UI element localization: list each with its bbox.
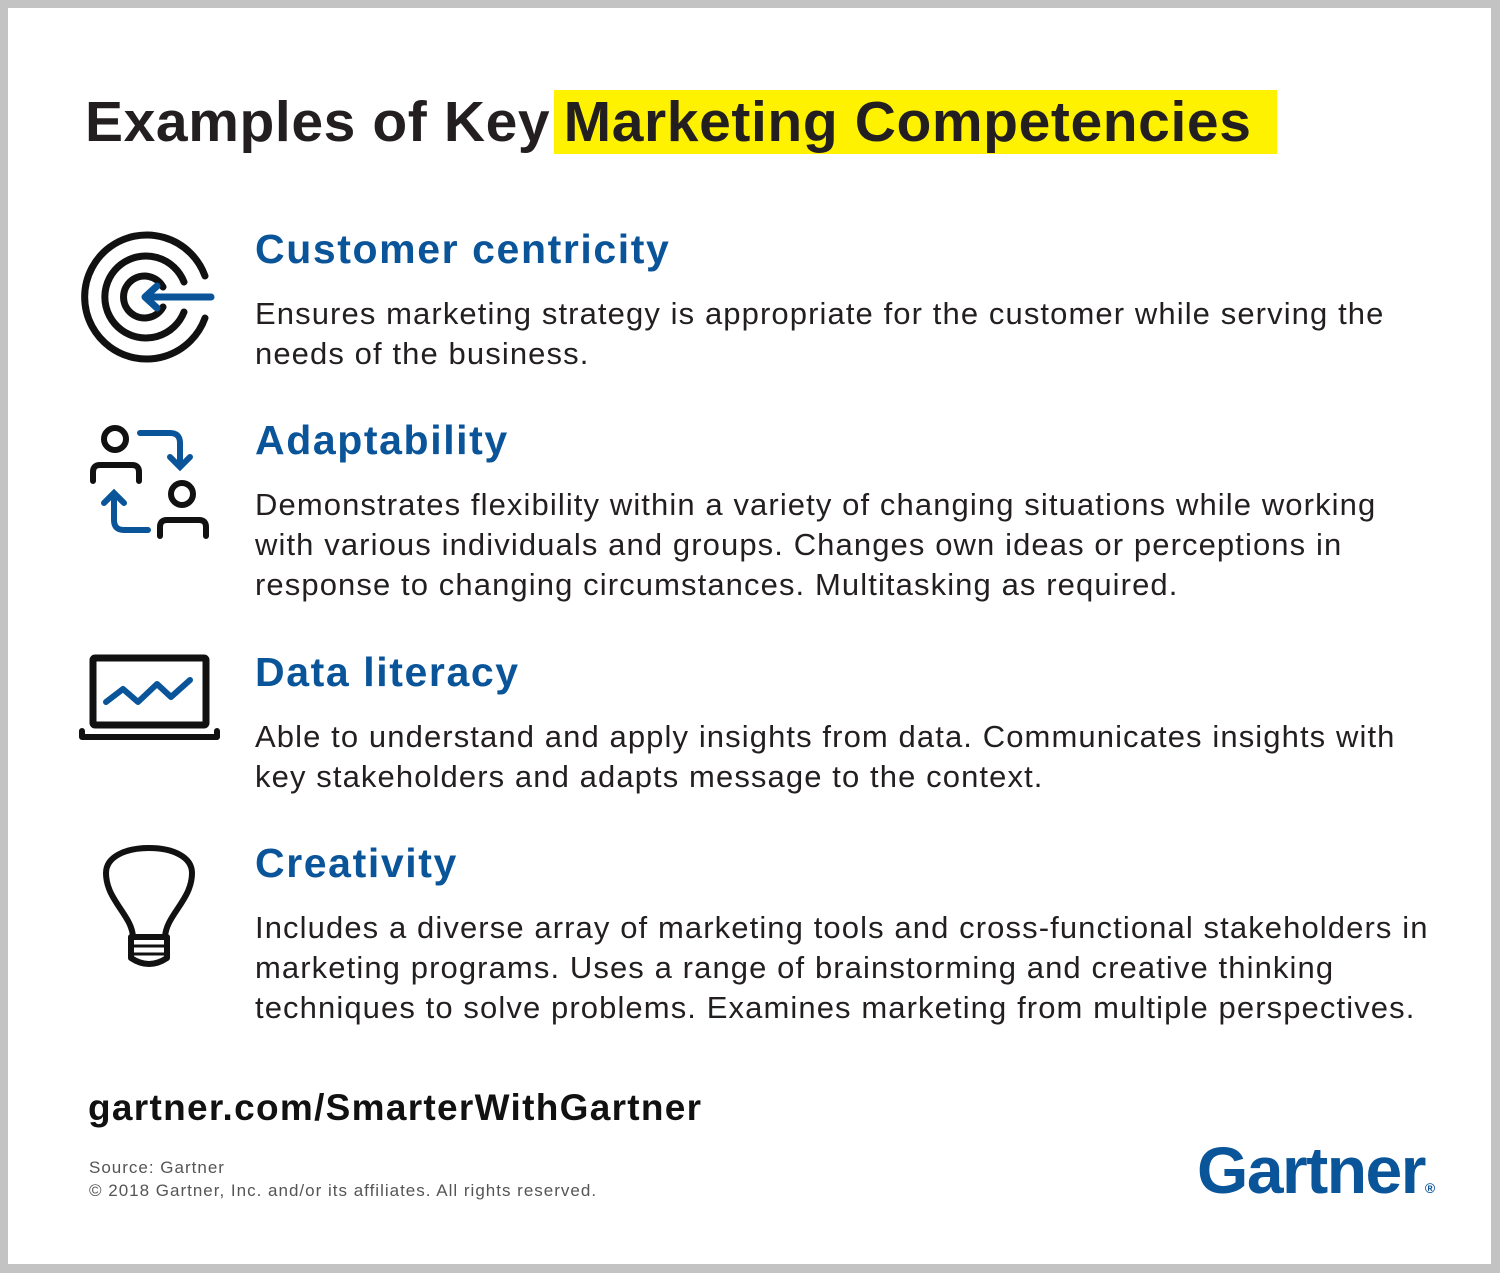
icon: laptop chart	[82, 658, 217, 737]
logo: Gartner: Gartner®	[1197, 1133, 1435, 1207]
text: customer centricity: needs of the business.	[255, 336, 589, 371]
icon: target	[85, 235, 211, 359]
text: customer centricity: Ensures marketing strategy is appropriate for the customer while serving the	[255, 296, 1384, 331]
source note: © 2018 Gartner, Inc. and/or its affiliates. All rights reserved.	[89, 1181, 597, 1200]
heading: Adaptability: Adaptability	[255, 417, 509, 463]
source note: Source: Gartner	[89, 1158, 225, 1177]
text: data literacy: Able to understand and apply insights from data. Communicates insights with	[255, 719, 1396, 754]
text: adaptability: Demonstrates flexibility within a variety of changing situations while working	[255, 487, 1376, 522]
url: gartner.com/SmarterWithGartner	[88, 1087, 702, 1128]
text: adaptability: response to changing circumstances. Multitasking as required.	[255, 567, 1178, 602]
text: adaptability: with various individuals and groups. Changes own ideas or perceptions in	[255, 527, 1342, 562]
text: creativity	[255, 910, 1429, 1025]
heading: Customer centricity: Customer centricity	[255, 226, 670, 272]
text: creativity: Includes a diverse array of marketing tools and cross-functional stakeholders in	[255, 910, 1429, 945]
text: adaptability	[255, 487, 1376, 602]
title: Examples of Key Marketing Competencies	[85, 90, 1252, 154]
text: customer centricity	[255, 296, 1384, 371]
text: data literacy: key stakeholders and adapts message to the context.	[255, 759, 1044, 794]
heading: Data literacy: Data literacy	[255, 649, 520, 695]
source note	[89, 1158, 597, 1200]
text: data literacy	[255, 719, 1396, 794]
heading: Creativity: Creativity	[255, 840, 458, 886]
icon: people exchange	[93, 428, 206, 536]
icon: light bulb	[106, 848, 192, 964]
text: creativity: techniques to solve problems. Examines marketing from multiple perspectives.	[255, 990, 1415, 1025]
text: creativity: marketing programs. Uses a range of brainstorming and creative thinking	[255, 950, 1334, 985]
